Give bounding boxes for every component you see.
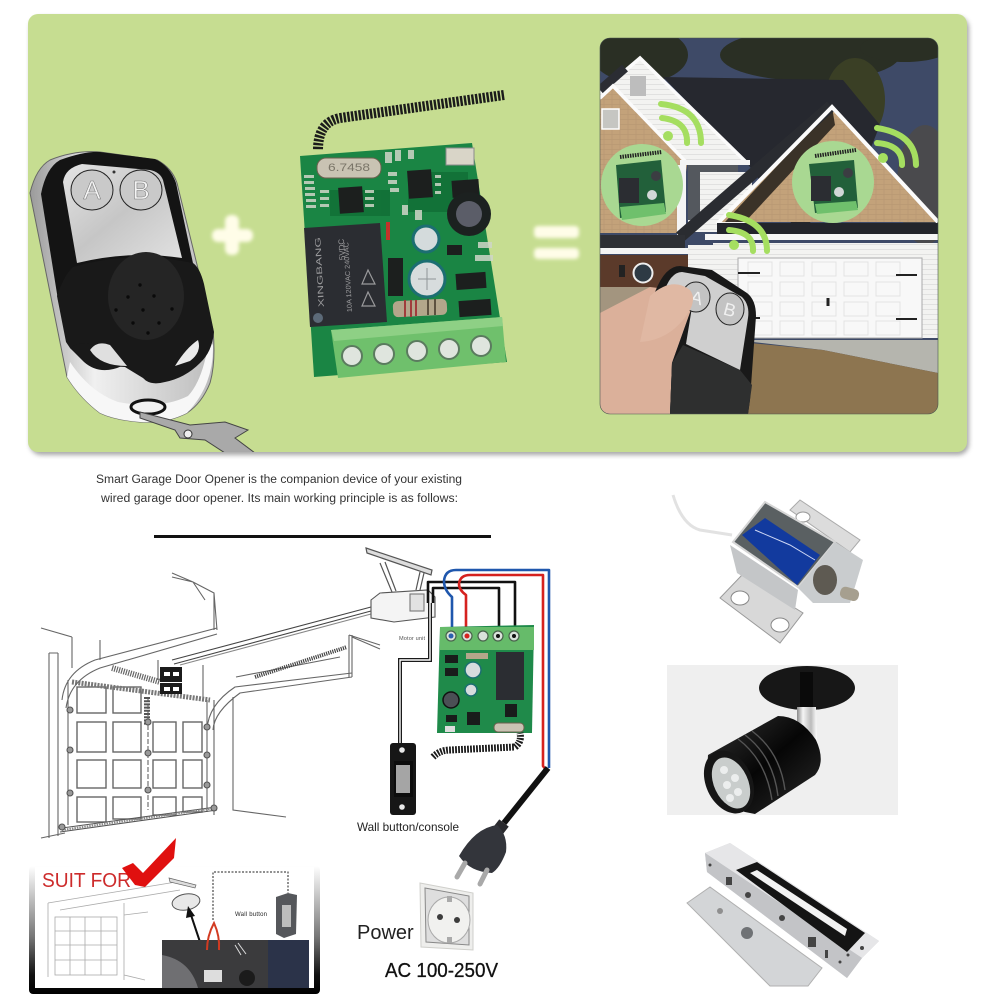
panel: green product equation	[28, 14, 969, 455]
voltage label: AC 100-250V	[385, 960, 499, 982]
receiver board: 6.7458	[328, 162, 370, 174]
wiring receiver board	[437, 625, 534, 733]
thumb	[640, 284, 693, 342]
wiring antenna coil	[433, 733, 520, 757]
product: black spot lamp	[667, 665, 898, 822]
ceiling bracket	[172, 573, 217, 630]
garage door	[738, 258, 922, 338]
button B	[120, 170, 162, 210]
suit for label: SUIT FOR	[42, 870, 131, 892]
wall button wire	[400, 603, 430, 743]
right brick gable	[717, 107, 938, 222]
power label: Power	[357, 922, 414, 944]
receiver board: 10A 120VAC 240VAC	[343, 242, 354, 312]
silver button plate	[63, 164, 182, 263]
button A	[71, 170, 113, 210]
wall button caption: Wall button	[235, 912, 267, 918]
trees	[600, 38, 938, 243]
inset: suit for	[29, 838, 320, 994]
crystal	[317, 158, 381, 178]
white gable	[600, 60, 742, 160]
icon: equals sign	[534, 226, 579, 259]
brick porch wall	[600, 255, 688, 290]
door frame	[49, 637, 214, 838]
button A: A	[83, 175, 101, 205]
garage door line drawing	[41, 548, 435, 838]
dashed connection	[213, 872, 288, 920]
receiver board	[300, 95, 507, 378]
garage wall	[713, 243, 938, 338]
product: solenoid lock	[673, 495, 863, 643]
left receiver circle	[601, 144, 683, 226]
icon: plus sign	[212, 215, 253, 255]
house photo scene	[592, 27, 953, 414]
arrow to opener	[186, 906, 200, 942]
wall button	[390, 743, 416, 815]
receiver board: XINGBANG	[313, 237, 326, 307]
wall socket	[420, 883, 473, 950]
driveway	[753, 340, 938, 373]
rail	[172, 607, 371, 664]
motor unit box	[371, 590, 435, 622]
chain	[147, 697, 149, 810]
torsion spring	[255, 647, 347, 677]
remote in hand: B	[721, 299, 738, 321]
resistors	[393, 299, 447, 317]
motor bracket	[366, 548, 432, 592]
relay	[304, 223, 387, 327]
wifi icon lower	[729, 215, 767, 251]
text block: description: Smart Garage Door Opener is the companion device of your existing	[96, 474, 462, 486]
receiver board: 5VDC	[337, 238, 347, 260]
main roof	[663, 77, 880, 235]
mini opener	[169, 878, 201, 912]
mini garage door	[48, 882, 180, 980]
remote in hand	[655, 266, 756, 414]
screws	[342, 336, 491, 366]
product: magnetic door lock	[687, 843, 879, 986]
icon: remote control key fob	[30, 152, 255, 453]
button B: B	[132, 175, 150, 205]
wifi icon left	[661, 104, 701, 143]
capacitors	[413, 226, 439, 252]
bottom rail	[60, 807, 217, 832]
key ring	[131, 400, 255, 453]
wires to receiver	[428, 570, 549, 770]
mini wall button	[276, 893, 297, 938]
text block: description: wired garage door opener. Its main working principle is as follows:	[100, 493, 458, 505]
rubber cover	[57, 257, 214, 383]
fascia	[717, 223, 938, 234]
remote in hand: A	[688, 287, 705, 309]
opener photo	[162, 940, 309, 988]
lawn	[748, 343, 938, 414]
header beam and arch	[72, 682, 210, 700]
photo rounded edge	[600, 38, 938, 414]
red check mark	[122, 838, 176, 887]
door panels	[77, 687, 202, 822]
power plug and cable	[457, 768, 548, 884]
motor unit label: Motor unit	[399, 636, 425, 642]
divider line	[154, 535, 491, 538]
inductor	[447, 192, 491, 236]
wall button label: Wall button/console	[357, 820, 459, 834]
porch siding	[688, 172, 752, 232]
door lock blocks	[160, 667, 182, 694]
right receiver circle	[792, 141, 874, 223]
left brick gable	[600, 88, 687, 233]
chips	[338, 169, 492, 317]
right track	[207, 673, 352, 730]
small board components	[304, 150, 493, 261]
antenna coil	[318, 95, 504, 150]
text block: description	[96, 474, 462, 505]
black wires	[428, 582, 515, 635]
blue wire	[444, 570, 549, 768]
hand	[600, 287, 692, 414]
red wire	[459, 575, 546, 770]
red jumper wire	[207, 923, 219, 950]
terminal block	[331, 317, 506, 378]
hinges	[59, 707, 217, 830]
wifi icon right	[877, 128, 916, 165]
